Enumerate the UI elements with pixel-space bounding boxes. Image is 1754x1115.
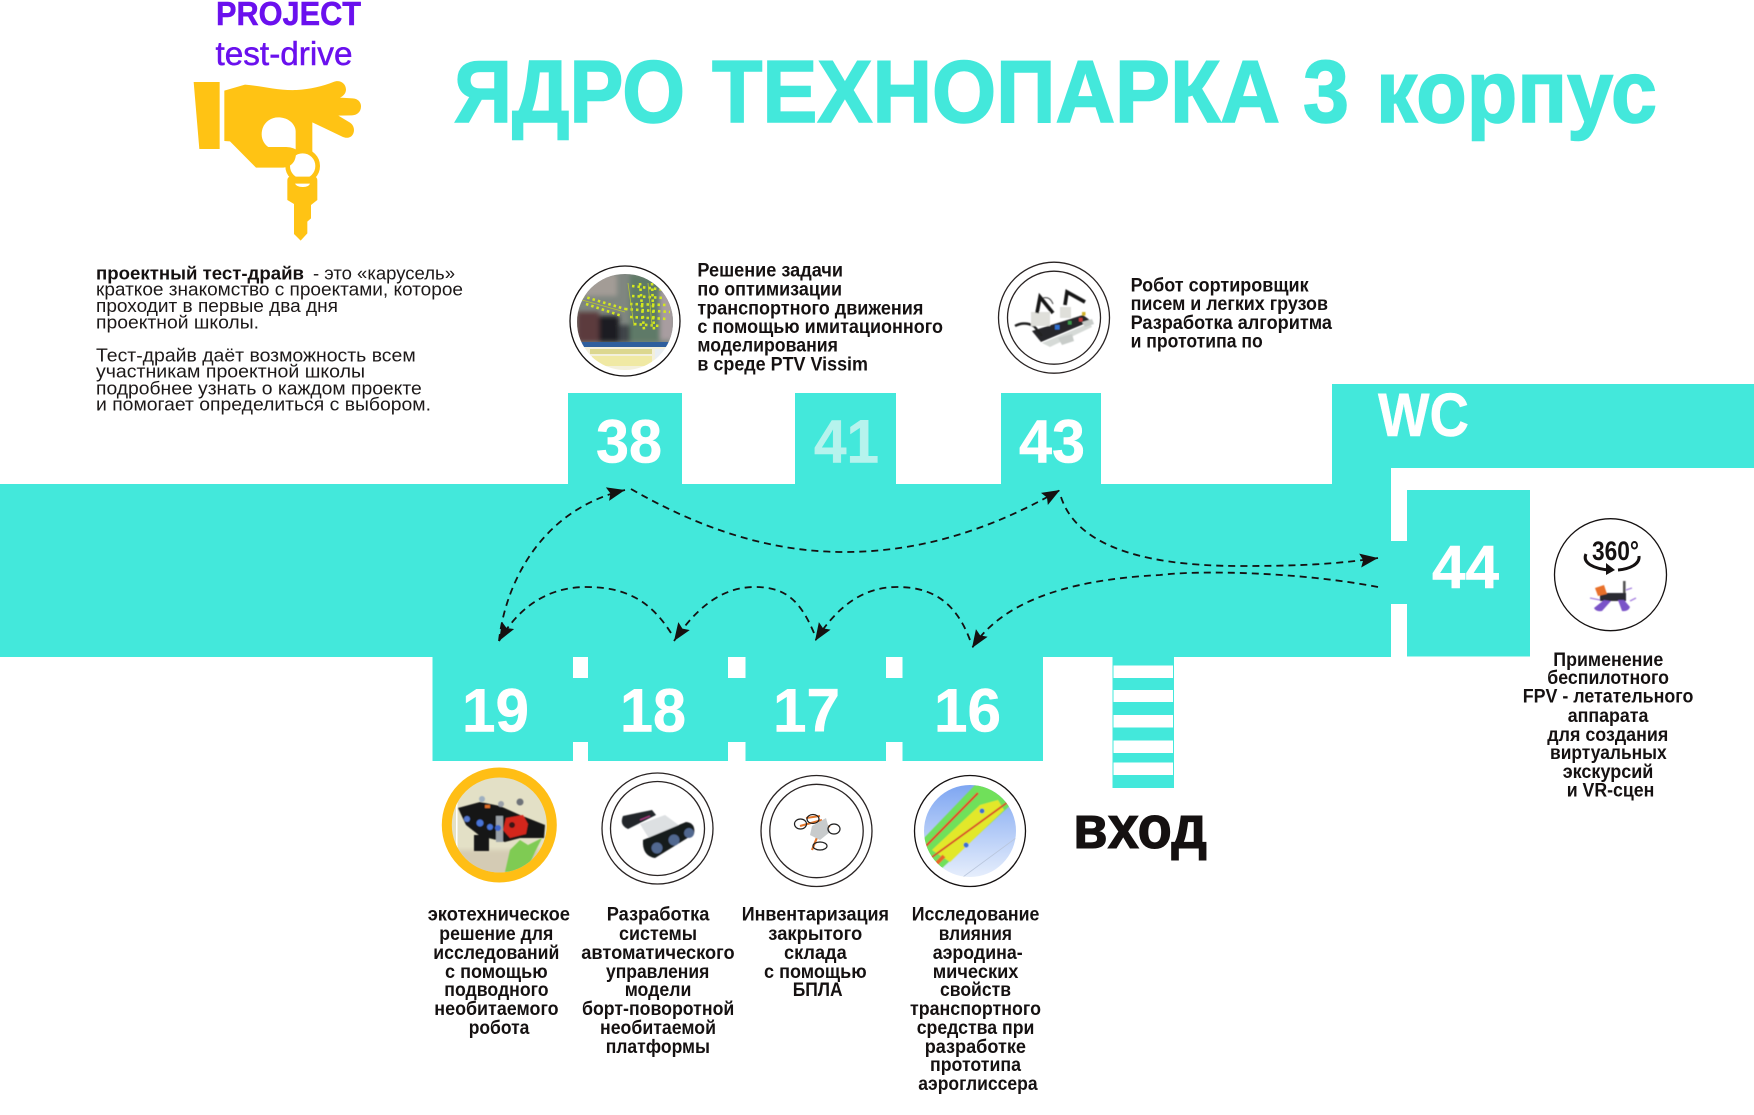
room numbers: 19	[462, 676, 529, 744]
project description: 44: Применение	[1553, 650, 1663, 671]
project description: 18	[581, 905, 735, 1058]
project description: 19	[428, 905, 570, 1039]
project description: 16: прототипа	[930, 1055, 1021, 1076]
icon: 360 degrees: 360°	[1592, 536, 1639, 566]
project description: 17: склада	[784, 943, 847, 964]
project description: 43: и прототипа по	[1131, 332, 1263, 353]
project description: 44: FPV - летательного	[1523, 687, 1693, 708]
title: 3	[1303, 42, 1349, 141]
photo circle: project 38 traffic simulation	[570, 266, 680, 376]
intro text: проходит в первые два дня	[96, 295, 338, 316]
project description: 16: Исследование	[912, 905, 1039, 926]
project description: 38: транспортного движения	[697, 299, 923, 320]
room numbers: 38	[596, 408, 662, 476]
project description: 18: модели	[625, 980, 691, 1001]
room 41 block	[795, 393, 896, 485]
project description: 44: и VR-сцен	[1567, 781, 1654, 802]
room numbers: 44	[1432, 533, 1499, 601]
project description: 19: робота	[469, 1018, 530, 1039]
route arrows	[499, 489, 1378, 648]
project description: 44: экскурсий	[1563, 762, 1653, 783]
project description: 19: экотехническое	[428, 905, 570, 926]
room numbers: 16	[934, 676, 1001, 744]
project description: 44: виртуальных	[1550, 743, 1667, 764]
project description: 17: закрытого	[768, 924, 862, 945]
entrance label: вход	[1073, 794, 1207, 861]
project description: 19: решение для	[439, 924, 553, 945]
project description: 17: БПЛА	[793, 980, 843, 1001]
project description: 38: моделирования	[697, 336, 838, 357]
project description: 44: аппарата	[1568, 706, 1649, 727]
intro text: подробнее узнать о каждом проекте	[96, 377, 422, 398]
project description: 16: мических	[933, 962, 1019, 983]
project description: 38: Решение задачи	[697, 261, 843, 282]
project description: 44	[1523, 650, 1693, 802]
project description: 44: беспилотного	[1547, 668, 1669, 689]
project description: 16: транспортного	[910, 999, 1041, 1020]
project description: 18: борт-поворотной	[582, 999, 734, 1020]
rooms 19 to 16 block	[432, 656, 1043, 761]
project description: 18: необитаемой	[600, 1018, 716, 1039]
room numbers: 43	[1019, 408, 1085, 476]
photo circle: project 43 sorting robot	[998, 262, 1110, 373]
title: корпус	[1376, 42, 1657, 141]
project description: 43	[1131, 276, 1332, 353]
project description: 16	[910, 905, 1041, 1095]
photo circle: project 17 quadcopter	[761, 776, 872, 886]
room numbers: 17	[773, 676, 840, 744]
project description: 43: писем и легких грузов	[1131, 294, 1328, 315]
room 38 block	[568, 393, 682, 485]
project description: 38	[697, 261, 943, 376]
intro text: краткое знакомство с проектами, которое	[96, 279, 463, 300]
project description: 19: необитаемого	[434, 999, 559, 1020]
project description: 17: с помощью	[764, 962, 867, 983]
project description: 18: управления	[606, 962, 709, 983]
project description: 16: влияния	[939, 924, 1012, 945]
project description: 16: средства при	[917, 1018, 1034, 1039]
title	[454, 42, 1657, 141]
project test-drive logo text: test-drive	[216, 35, 352, 72]
icon: FPV drone	[1590, 581, 1636, 611]
project description: 18: системы	[619, 924, 697, 945]
title: ТЕХНОПАРКА	[712, 42, 1280, 141]
project description: 19: исследований	[433, 943, 559, 964]
WC block	[1332, 384, 1754, 485]
intro text: участникам проектной школы	[96, 361, 365, 382]
intro text	[96, 262, 463, 415]
project test-drive logo text	[216, 0, 361, 72]
project description: 17	[742, 905, 889, 1001]
project description: 16: аэродина-	[933, 943, 1023, 964]
photo circle: project 44 FPV drone 360	[1554, 519, 1666, 631]
intro text: - это «карусель»	[313, 262, 455, 284]
photo circle: project 18 tracked platform	[602, 773, 713, 884]
project description: 18: автоматического	[581, 943, 735, 964]
room numbers: WC	[1378, 381, 1469, 449]
room numbers	[462, 381, 1499, 744]
project description: 38: по оптимизации	[697, 280, 842, 301]
project description: 38: с помощью имитационного	[697, 317, 943, 338]
entrance stairs	[1112, 656, 1174, 788]
floor plan	[0, 384, 1754, 788]
project description: 17: Инвентаризация	[742, 905, 889, 926]
project description: 43: Робот сортировщик	[1131, 276, 1309, 297]
room 43 block	[1001, 393, 1101, 485]
project description: 18: Разработка	[607, 905, 710, 926]
project description: 19: подводного	[444, 980, 549, 1001]
intro text: проектный тест-драйв	[96, 262, 304, 284]
intro text: Тест-драйв даёт возможность всем	[96, 345, 416, 366]
photo circle: project 16 aerodynamic simulation	[914, 776, 1026, 886]
room numbers: 41	[814, 408, 879, 476]
corridor	[0, 484, 1391, 657]
project description: 19: с помощью	[445, 962, 548, 983]
project description: 16: разработке	[925, 1037, 1026, 1058]
intro text: и помогает определиться с выбором.	[96, 394, 431, 415]
project description: 16: свойств	[940, 980, 1011, 1001]
room numbers: 18	[620, 676, 686, 744]
project description: 43: Разработка алгоритма	[1131, 313, 1332, 334]
project description: 18: платформы	[606, 1037, 710, 1058]
project description: 16: аэроглиссера	[918, 1074, 1038, 1095]
intro text: проектной школы.	[96, 312, 259, 332]
project description: 44: для создания	[1547, 725, 1668, 746]
photo circle: project 19 underwater robot	[447, 772, 552, 878]
room 44 block	[1390, 490, 1530, 656]
icon: hand holding key	[194, 81, 361, 241]
project description: 38: в среде PTV Vissim	[697, 355, 868, 376]
title: ЯДРО	[454, 42, 685, 141]
